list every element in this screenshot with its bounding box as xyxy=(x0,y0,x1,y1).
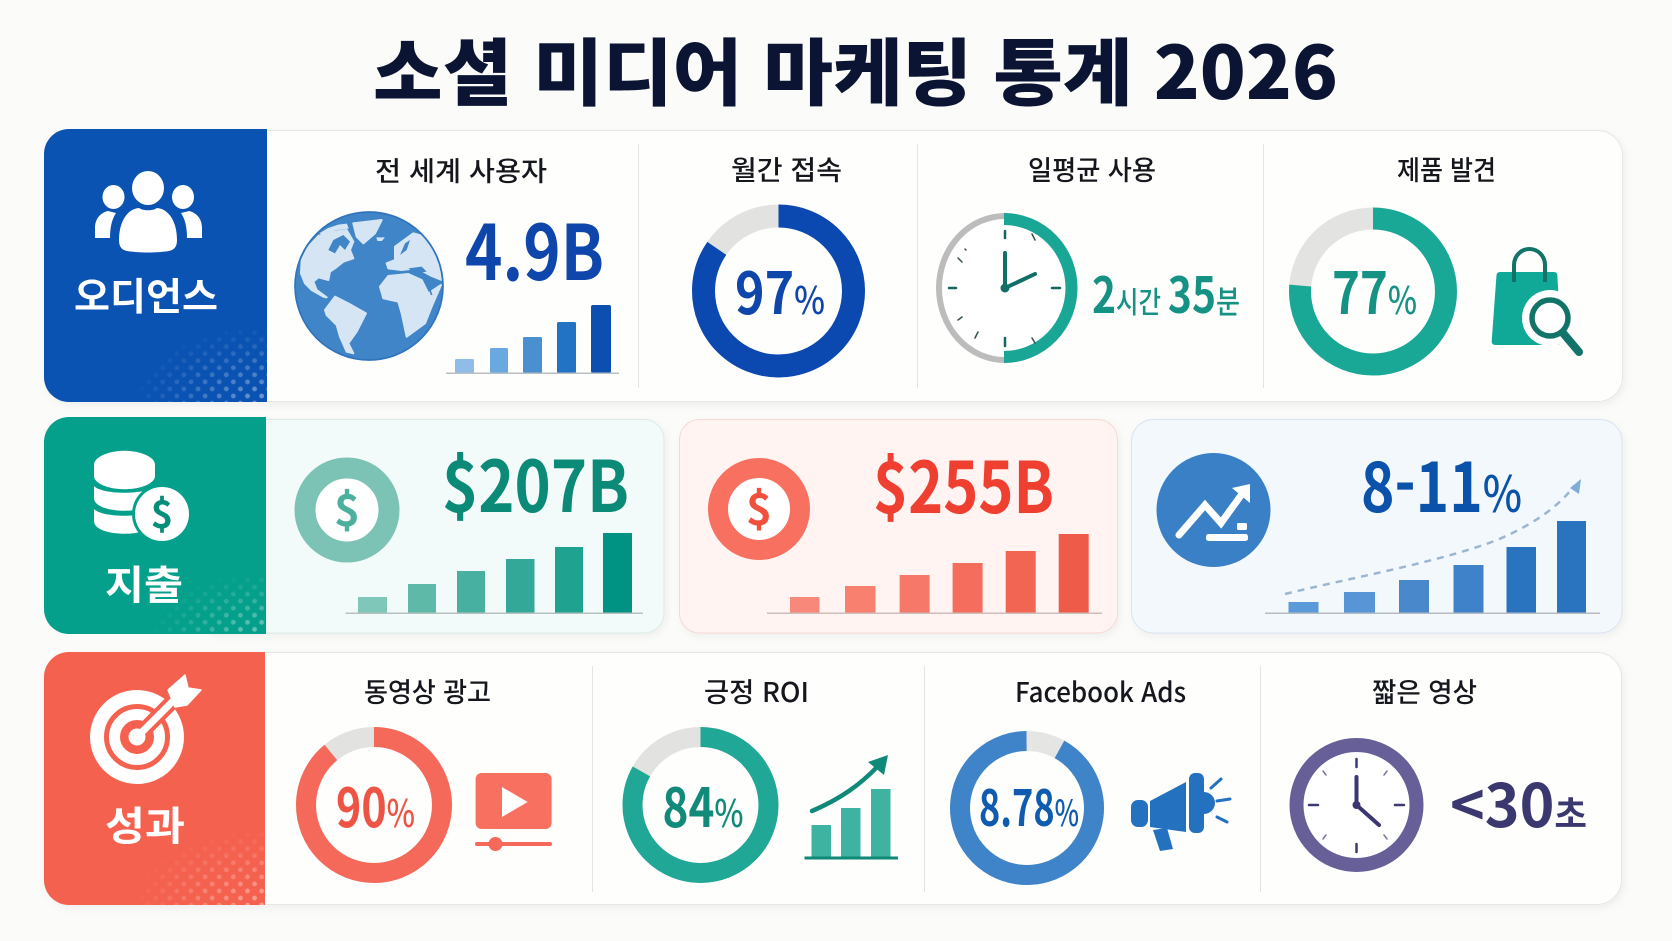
heading: 짧은 영상 xyxy=(1372,671,1477,710)
icon: clock xyxy=(1296,745,1416,865)
heading: 긍정 ROI xyxy=(704,671,809,710)
heading: 월간 접속 xyxy=(731,149,842,188)
icon: audience people xyxy=(95,171,202,252)
icon: dollar coin: $ xyxy=(334,475,360,539)
icon: coin stack: $ xyxy=(151,484,173,539)
stat: positive ROI xyxy=(632,671,898,873)
icon: dollar coin xyxy=(718,468,800,550)
panel: performance label xyxy=(44,652,265,905)
donut chart xyxy=(306,737,442,873)
arrow: dashed trend xyxy=(1285,479,1581,594)
value: 84% xyxy=(662,764,744,843)
panel: audience label xyxy=(44,129,267,402)
value: 8.78% xyxy=(979,769,1079,841)
stat: video ads xyxy=(306,671,552,873)
panel: spending card 1 xyxy=(200,420,664,633)
label: performance: 성과 xyxy=(105,794,185,852)
heading: 제품 발견 xyxy=(1397,149,1496,188)
bar chart xyxy=(346,533,643,614)
donut chart xyxy=(632,737,768,873)
icon: rising chart xyxy=(804,755,898,860)
bar chart xyxy=(1265,521,1600,614)
bar chart xyxy=(446,305,619,374)
icon: target with arrow xyxy=(97,675,201,777)
icon: shopping bag search xyxy=(1492,249,1579,352)
value: 4.9B xyxy=(465,192,604,302)
icon: video player xyxy=(475,773,552,851)
label: audience: 오디언스 xyxy=(74,266,218,321)
value: 90% xyxy=(336,764,415,843)
icon: dollar coin xyxy=(305,468,389,552)
donut chart xyxy=(936,717,1118,899)
stat: product discovery xyxy=(1300,149,1579,364)
heading: 일평균 사용 xyxy=(1028,149,1156,188)
heading: 전 세계 사용자 xyxy=(375,150,547,189)
stat: facebook ads xyxy=(936,671,1230,899)
value: 8-11% xyxy=(1361,433,1522,532)
stat: short video xyxy=(1296,671,1587,865)
panel: spending card 3 xyxy=(1132,420,1622,633)
stat: monthly access xyxy=(704,149,854,366)
panel: performance row xyxy=(44,652,1622,905)
icon: megaphone xyxy=(1131,773,1230,851)
icon: globe xyxy=(295,212,443,360)
heading: Facebook Ads xyxy=(1015,671,1186,710)
bar chart xyxy=(767,534,1102,614)
stat: global users xyxy=(295,150,619,374)
icon: clock xyxy=(939,216,1072,360)
value: 97% xyxy=(735,247,825,331)
panel: spending label xyxy=(44,417,266,634)
label: spending: 지출 xyxy=(105,553,183,611)
heading: 동영상 광고 xyxy=(364,671,491,710)
value: $255B xyxy=(873,432,1054,534)
value: <30초 xyxy=(1450,758,1587,845)
value: 2시간 35분 xyxy=(1092,256,1240,328)
icon: growth circle xyxy=(1156,453,1270,567)
title: 소셜 미디어 마케팅 통계 2026 xyxy=(373,15,1338,121)
stat: daily usage xyxy=(939,149,1240,360)
panel: spending row xyxy=(44,417,1622,634)
value: $207B xyxy=(442,431,629,533)
panel: spending card 2 xyxy=(680,420,1118,633)
icon: dollar coin: $ xyxy=(746,474,772,538)
value: 77% xyxy=(1332,247,1417,331)
panel: audience row xyxy=(44,129,1622,402)
icon: coin stack xyxy=(94,451,192,544)
donut chart xyxy=(704,216,854,366)
donut chart xyxy=(1300,218,1446,364)
